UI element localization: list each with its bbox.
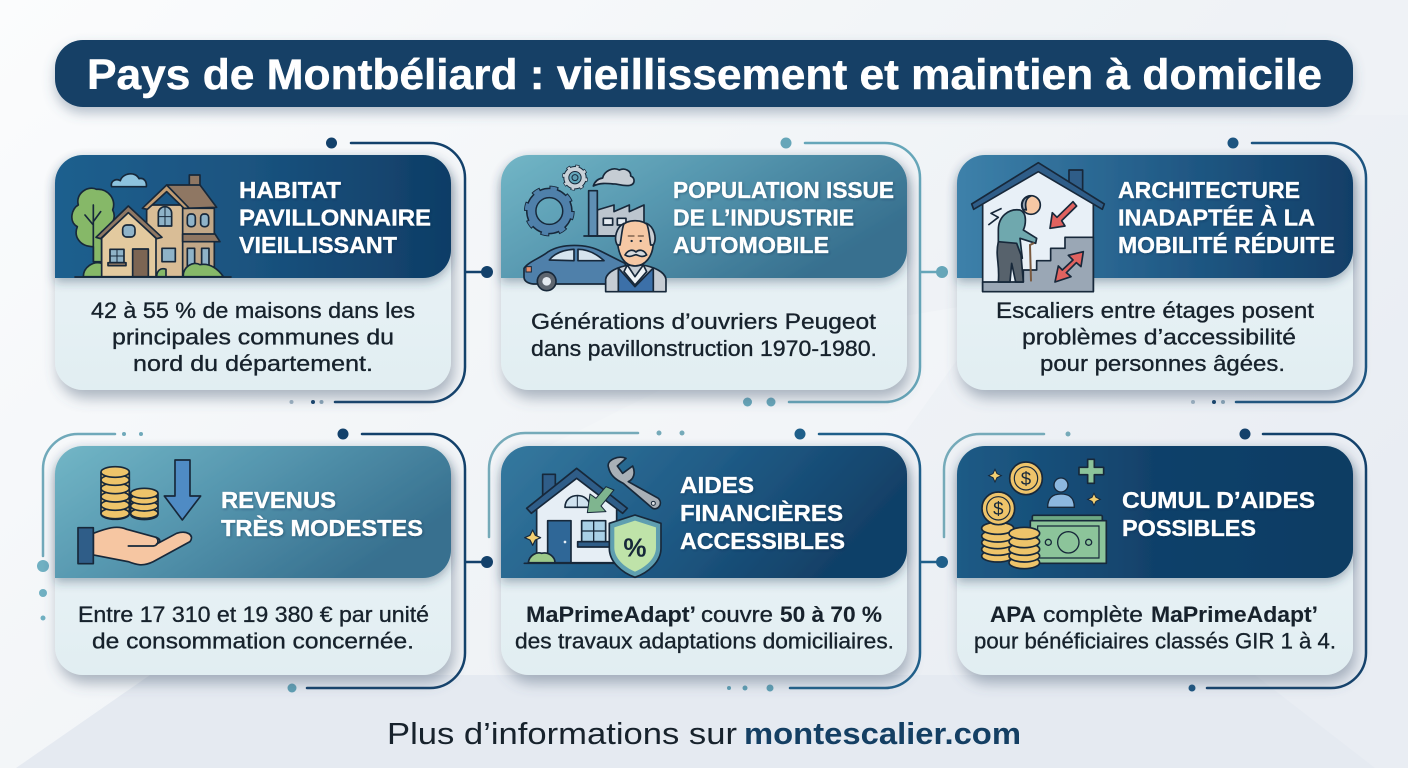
icon: elderly person climbing stairs [972, 163, 1104, 292]
connector: card 4 [37, 428, 493, 692]
icon: industry, car and retired worker [524, 167, 666, 292]
text block [78, 602, 429, 654]
connector: card 3 [1191, 138, 1366, 404]
icon: coins, banknotes and beneficiary: $ [993, 498, 1004, 519]
title banner: Pays de Montbéliard : vieillissement et maintien à domicile [87, 51, 1322, 99]
text block: Générations d’ouvriers Peugeot [531, 309, 876, 334]
icon: coins, banknotes and beneficiary: $ [1021, 468, 1032, 489]
text block: nord du département. [133, 351, 373, 376]
heading: FINANCIÈRES [680, 499, 843, 526]
heading [673, 177, 894, 258]
panel: revenus tres modestes [55, 446, 451, 675]
footer [387, 716, 1021, 751]
panel: population issue de l'industrie automobile [501, 155, 907, 390]
heading: TRÈS MODESTES [221, 514, 423, 541]
text block: APA [990, 602, 1036, 627]
icon: house, wrench and percent shield [524, 457, 661, 577]
heading: CUMUL D’AIDES [1122, 487, 1315, 513]
heading: AIDES [680, 472, 754, 498]
connector: card 1 [290, 138, 493, 404]
footer: montescalier.com [744, 716, 1021, 751]
text block: pour personnes âgées. [1040, 351, 1285, 376]
icon: house, wrench and percent shield: % [623, 533, 647, 563]
connector: card 2 [743, 138, 948, 406]
icon: coins, banknotes and beneficiary [982, 459, 1106, 569]
heading: MOBILITÉ RÉDUITE [1118, 231, 1335, 258]
text block [91, 298, 415, 376]
heading: REVENUS [221, 487, 336, 513]
text block: MaPrimeAdapt’ [1151, 602, 1318, 627]
title banner [55, 40, 1353, 107]
text block: couvre [701, 602, 773, 627]
heading: HABITAT [239, 177, 341, 203]
text block [515, 602, 894, 654]
heading [680, 472, 845, 554]
heading: POPULATION ISSUE [673, 177, 894, 203]
footer: Plus d’informations sur [387, 716, 737, 751]
heading [239, 177, 431, 258]
text block: Escaliers entre étages posent [996, 298, 1314, 323]
icon: houses [72, 174, 231, 277]
text block: complète [1043, 602, 1143, 627]
text block: Entre 17 310 et 19 380 € par unité [78, 602, 429, 627]
text block: principales communes du [112, 324, 394, 350]
panel: habitat pavillonnaire [55, 155, 451, 390]
heading: POSSIBLES [1122, 515, 1256, 541]
panel: aides financieres accessibles [501, 446, 907, 675]
heading: ACCESSIBLES [680, 528, 845, 554]
text block: MaPrimeAdapt’ [526, 602, 696, 627]
connector: card 6 [944, 428, 1366, 692]
connector: card 5 [489, 428, 948, 692]
text block: 42 à 55 % de maisons dans les [91, 298, 415, 323]
heading: VIEILLISSANT [239, 232, 397, 258]
text block: des travaux adaptations domiciliaires. [515, 628, 894, 654]
text block [974, 602, 1336, 654]
text block: de consommation concernée. [92, 628, 414, 654]
heading: DE L’INDUSTRIE [673, 204, 854, 230]
panel: architecture inadaptee [957, 155, 1353, 390]
text block [531, 309, 877, 361]
text block: problèmes d’accessibilité [1022, 324, 1296, 350]
text block: dans pavillonstruction 1970-1980. [531, 336, 877, 361]
text block: pour bénéficiaires classés GIR 1 à 4. [974, 628, 1336, 654]
panel: cumul d'aides possibles [957, 446, 1353, 675]
heading: PAVILLONNAIRE [239, 204, 431, 230]
heading [1122, 487, 1315, 541]
icon: coins, arrow and hand [78, 460, 201, 565]
heading [221, 487, 423, 541]
text block [996, 298, 1314, 376]
text block: 50 à 70 % [780, 602, 882, 627]
heading: ARCHITECTURE [1118, 177, 1300, 203]
heading [1118, 177, 1335, 258]
heading: INADAPTÉE À LA [1118, 204, 1315, 230]
heading: AUTOMOBILE [673, 232, 829, 258]
